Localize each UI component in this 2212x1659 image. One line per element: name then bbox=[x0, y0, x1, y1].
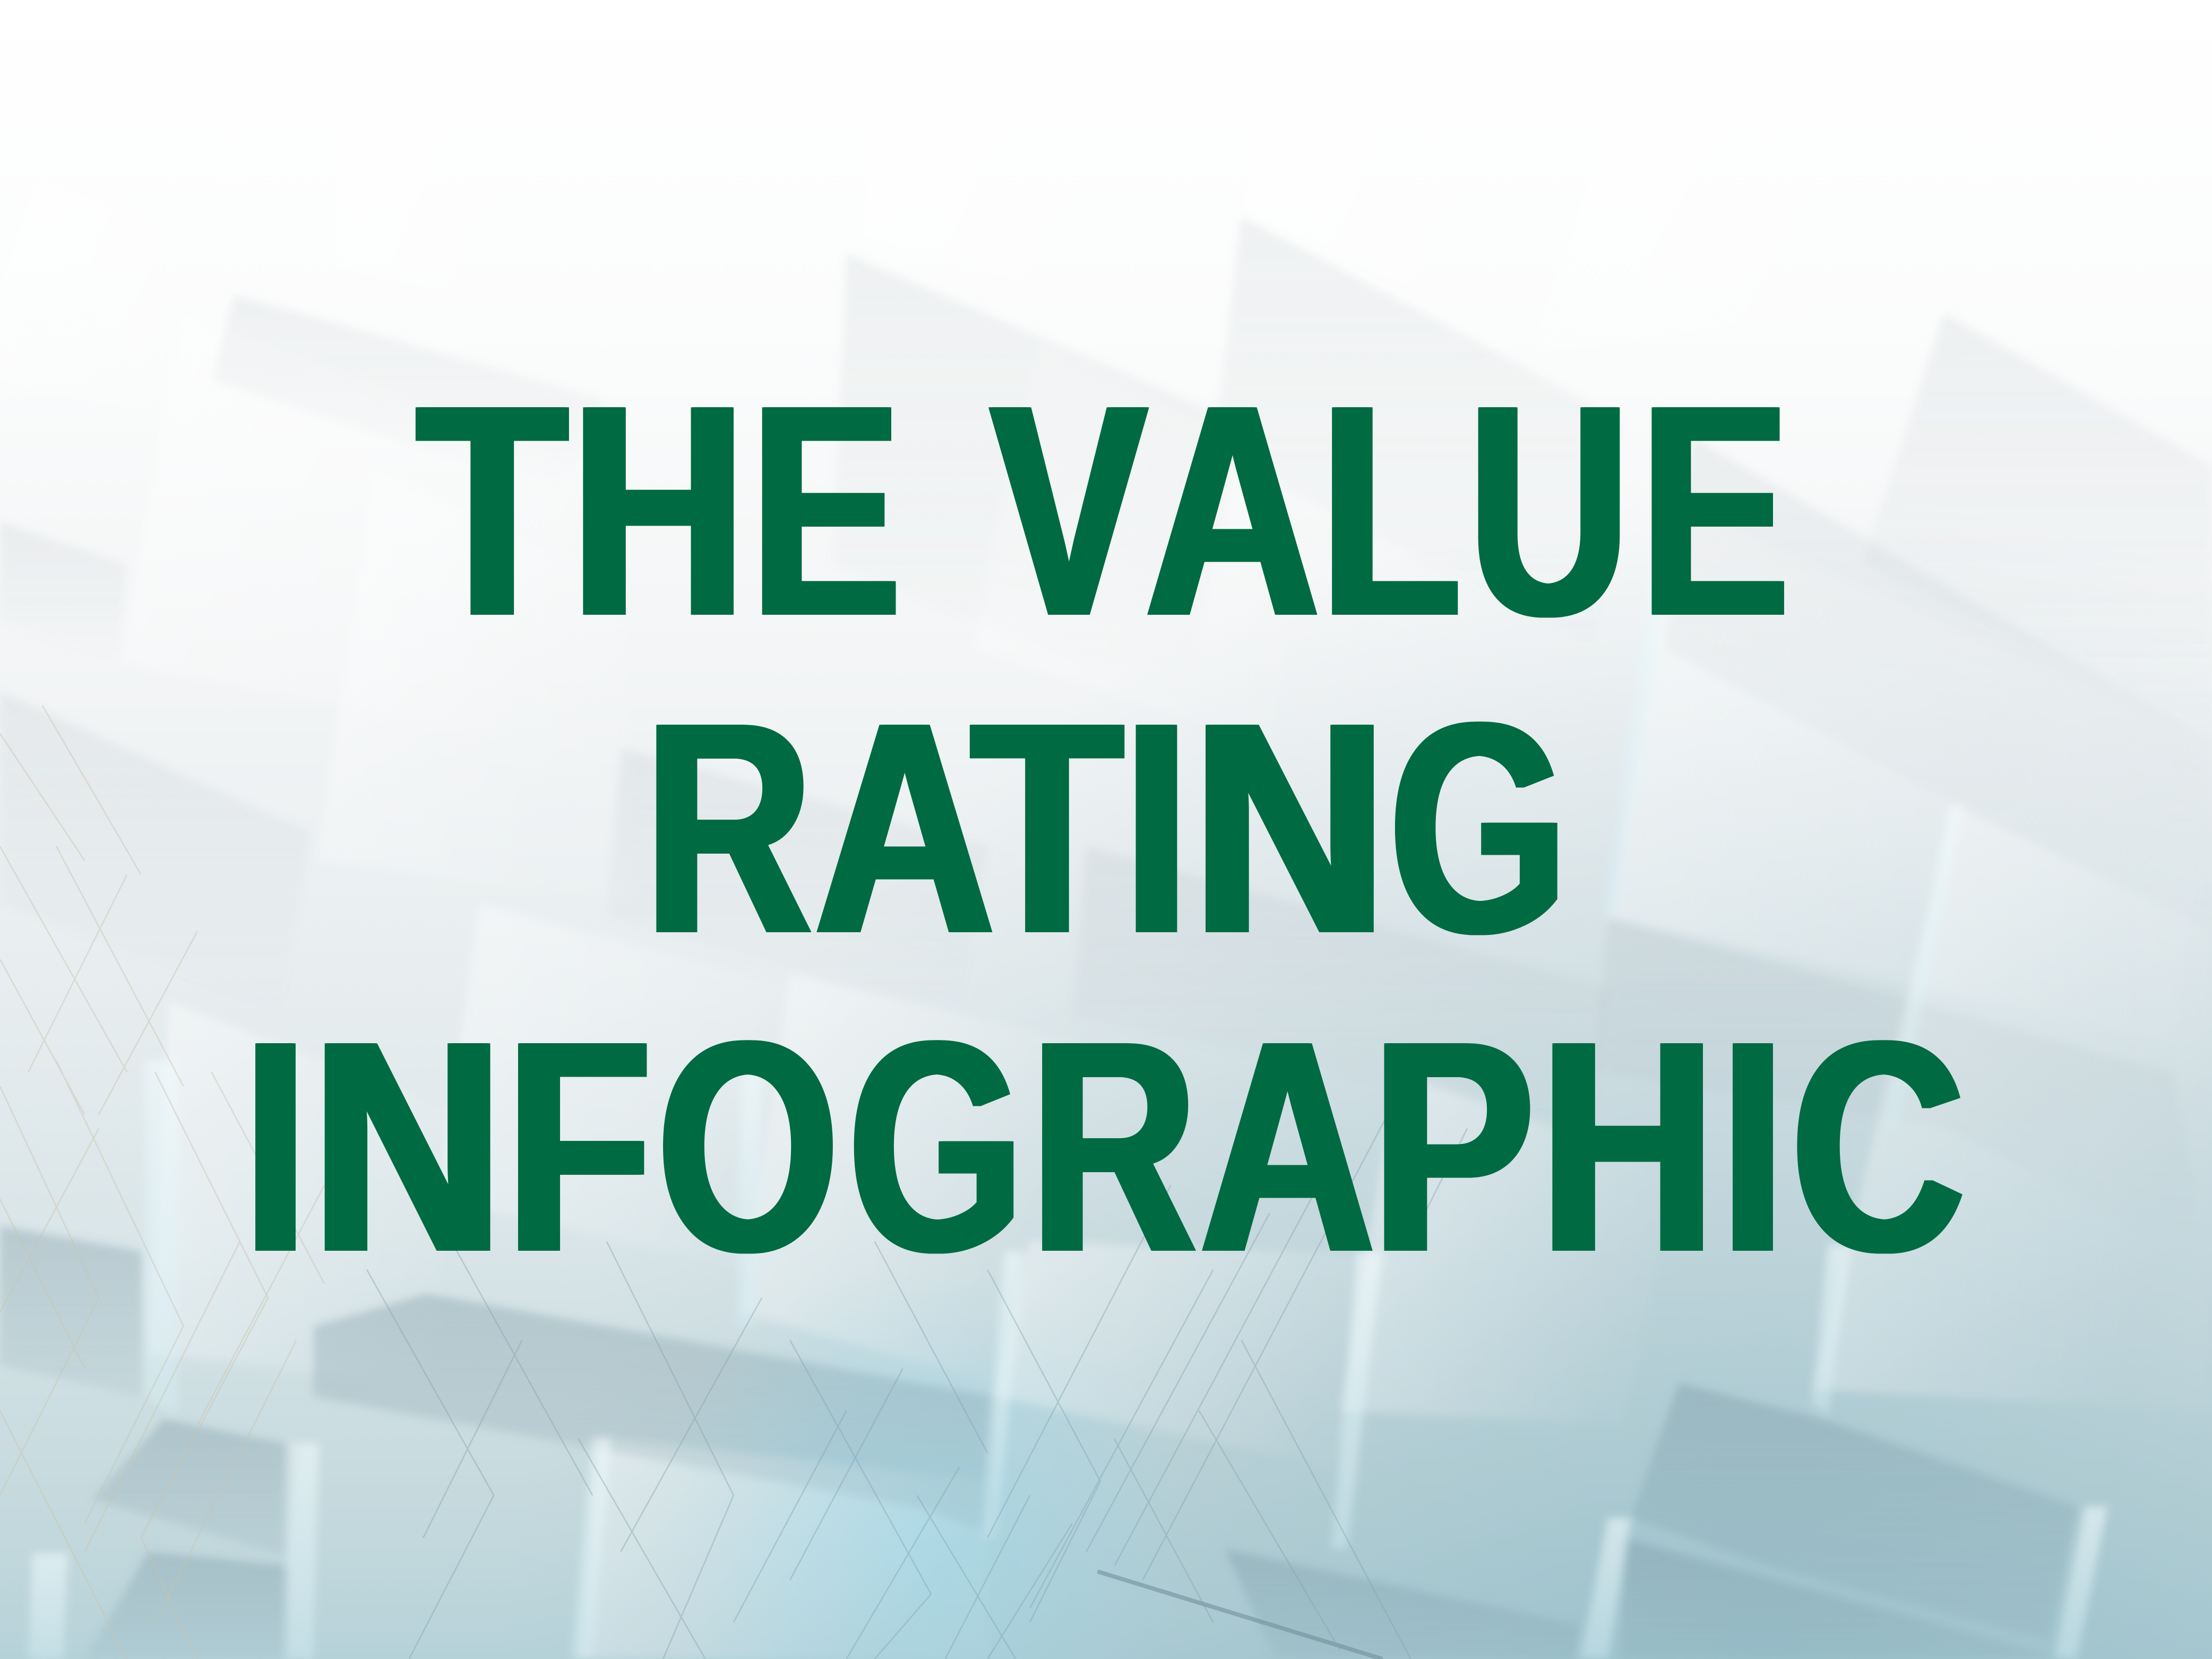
title line 3: N bbox=[311, 978, 504, 1315]
title line 3: F bbox=[506, 978, 652, 1315]
title line 3: I bbox=[1721, 978, 1785, 1315]
lower shadow bands bbox=[0, 1226, 2078, 1659]
title line 3: A bbox=[1200, 978, 1375, 1315]
title line 1: U bbox=[1468, 342, 1630, 679]
title line 2: A bbox=[814, 660, 995, 996]
title line 3: H bbox=[1540, 978, 1715, 1315]
title line 3 bbox=[244, 978, 1965, 1315]
title line 2: T bbox=[971, 660, 1123, 996]
title line 3: R bbox=[1030, 978, 1198, 1315]
title line 1: L bbox=[1320, 342, 1461, 679]
circuit lines, cool bbox=[367, 1044, 1467, 1659]
title line 1: E bbox=[751, 342, 901, 679]
title line 3: P bbox=[1372, 978, 1535, 1315]
title line 1 bbox=[415, 342, 1962, 1254]
title line 2: R bbox=[644, 660, 813, 996]
title line 1: V bbox=[991, 342, 1147, 679]
title line 1: H bbox=[571, 342, 746, 679]
title line 3: C bbox=[1791, 978, 1965, 1315]
title line 2: N bbox=[1192, 660, 1388, 996]
title line 1: T bbox=[417, 342, 567, 679]
title bbox=[244, 342, 1965, 1315]
light vertical streaks bbox=[28, 578, 2107, 1659]
grey shadow bands bbox=[0, 216, 2212, 1270]
title line 3: G bbox=[848, 978, 1024, 1315]
circuit lines, warm bbox=[0, 706, 324, 1659]
title line 3: I bbox=[244, 978, 307, 1315]
title line 1: E bbox=[1640, 342, 1789, 679]
title line 2: G bbox=[1389, 660, 1568, 996]
title line 1: A bbox=[1145, 342, 1320, 679]
dark crease line bbox=[1098, 1571, 1382, 1659]
title line 3: O bbox=[657, 978, 839, 1315]
title line 2: I bbox=[1124, 660, 1189, 996]
title line 2 bbox=[644, 660, 1962, 1254]
